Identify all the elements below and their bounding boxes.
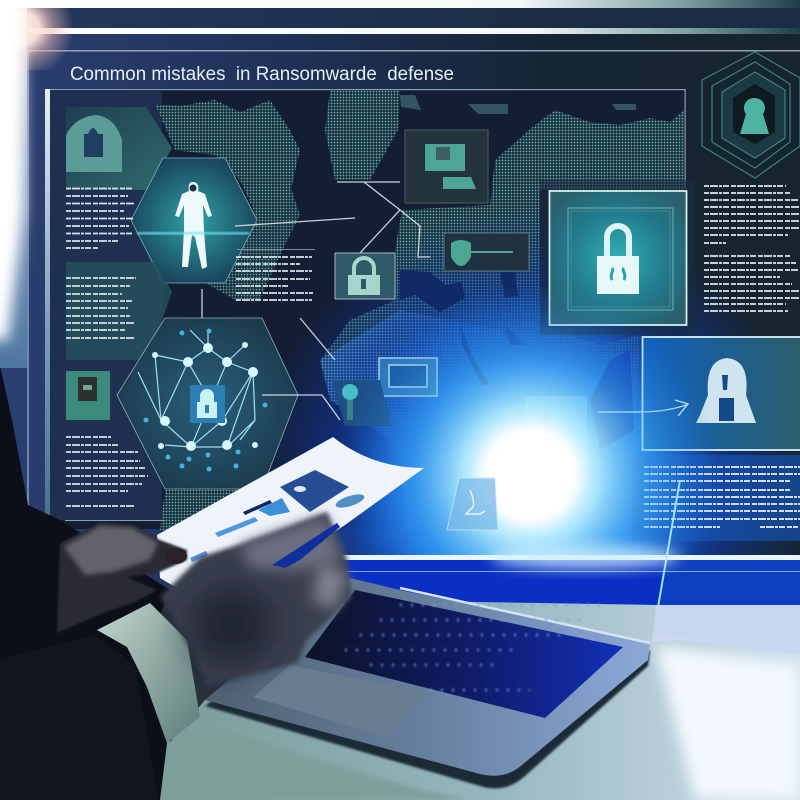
blue light wash: [45, 190, 800, 610]
map panel: [45, 89, 800, 610]
desk: [140, 600, 800, 800]
icon: padlock: [597, 226, 639, 294]
panel: network hexagon: [117, 318, 298, 489]
trackpad: [253, 665, 427, 737]
panel: monitor tile: [405, 130, 488, 203]
text block: right column 1: [704, 186, 800, 243]
panel: lower-right padlock box: [642, 337, 800, 450]
icon: magnifier keyhole: [332, 380, 392, 426]
suit: [0, 365, 170, 800]
connector lines: [202, 182, 430, 420]
pen: [272, 523, 340, 568]
arrow: [598, 400, 688, 416]
bright light flare: [330, 250, 800, 650]
text block: lower right: [632, 455, 800, 541]
world map land masses: [155, 90, 684, 530]
panel: lower-left text tile: [66, 262, 172, 360]
panel: top-left padlock tile: [66, 107, 172, 190]
text block: left column 2: [66, 278, 136, 338]
panel: small terminal tile: [66, 371, 110, 420]
panel: shield tile: [444, 233, 529, 271]
panel: main padlock: [540, 180, 695, 335]
monitor screen: [0, 8, 800, 608]
text block: left column 3: [66, 437, 148, 506]
panel: hazmat figure hexagon: [131, 158, 257, 283]
text block: left column 1: [66, 188, 135, 248]
left hand: [57, 523, 187, 633]
icon: person in protective suit: [175, 182, 212, 269]
panel: symbol box: #: [542, 409, 551, 426]
network diagram: [138, 330, 255, 447]
left edge glare: [0, 0, 800, 368]
panel: small padlock: [335, 253, 395, 299]
panel: monitor icon box: [379, 358, 437, 396]
icon: hexagon badge with keyhole: [702, 52, 800, 178]
laptop: [205, 578, 650, 788]
keyboard: [305, 590, 623, 718]
title: Common mistakes in Ransomwarde defense: [70, 64, 454, 85]
panel: trapezoid icon: [447, 478, 498, 530]
document: [157, 437, 424, 590]
text block: right column 2: [704, 256, 800, 311]
screen lower blue band: [330, 480, 800, 642]
icon: network padlock: [190, 385, 225, 423]
seas: [400, 270, 634, 450]
text block: map annotation: [236, 257, 313, 300]
right hand: [160, 512, 352, 687]
shirt cuff: [97, 603, 200, 743]
document chart blocks: [190, 470, 366, 562]
panel: symbol box: [526, 397, 586, 465]
